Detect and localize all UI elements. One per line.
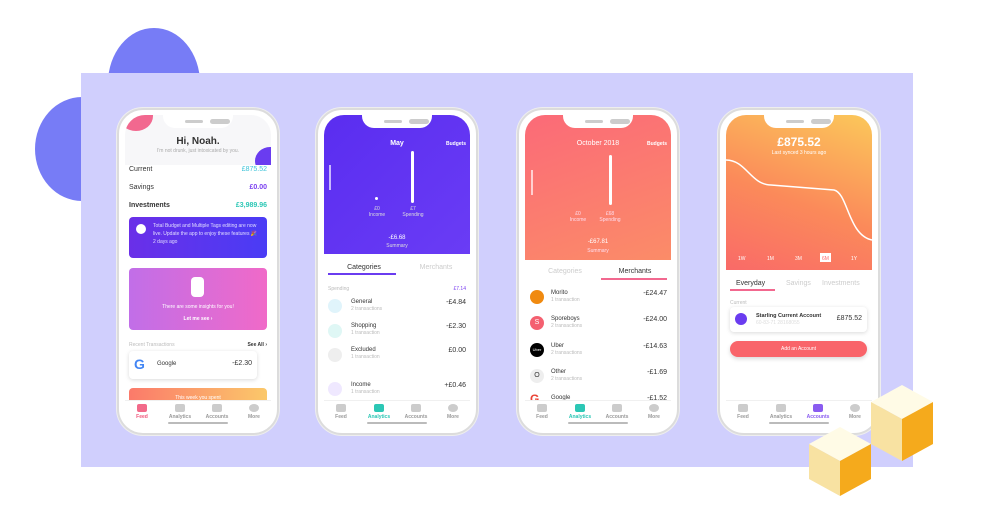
phone 2: categories	[316, 108, 478, 435]
tabs: Categories	[548, 268, 582, 275]
nav: More	[648, 414, 660, 420]
header line chart: 3M	[795, 256, 802, 262]
phone 2: categories: General	[351, 299, 372, 305]
add account button	[730, 341, 867, 357]
header chart: Income	[369, 212, 385, 218]
phone 1: feed	[117, 108, 279, 435]
header chart: Budgets	[446, 141, 466, 147]
header chart: October 2018	[577, 140, 619, 147]
nav	[726, 400, 872, 428]
background blob top	[108, 28, 200, 138]
header line chart: 1Y	[851, 256, 857, 262]
phone 3: merchants: Morito	[551, 290, 568, 296]
phone 3: merchants: G	[530, 392, 539, 406]
account card	[730, 307, 867, 332]
nav: Analytics	[169, 414, 191, 420]
phone 1: feed: £3,989.96	[236, 202, 267, 209]
google transaction: -£2.30	[232, 360, 252, 367]
phone 3: merchants: S	[535, 319, 539, 326]
header line chart: 1W	[738, 256, 746, 262]
insights card	[129, 268, 267, 330]
phone 3: merchants: Sporeboys	[551, 316, 580, 322]
header chart: £7	[410, 206, 416, 212]
balances: Current	[129, 166, 152, 173]
header	[125, 115, 271, 165]
phone 4: accounts: Current	[730, 300, 747, 306]
header: Hi, Noah.	[176, 136, 220, 147]
header chart: Income	[570, 217, 586, 223]
header chart	[525, 115, 671, 260]
header line chart: 1M	[767, 256, 774, 262]
google transaction: G	[134, 356, 145, 372]
insights card: There are some insights for you!	[162, 304, 234, 310]
phone 2: categories: £7.14	[453, 286, 466, 292]
update card	[129, 217, 267, 258]
nav: Analytics	[770, 414, 792, 420]
phone 2: categories: 1 transaction	[351, 354, 380, 360]
spent bar: This week you spent	[175, 395, 221, 401]
insights card: Let me see ›	[184, 316, 212, 322]
phone 2: categories: 1 transaction	[351, 389, 380, 395]
phone 3: merchants	[517, 108, 679, 435]
cubes	[809, 385, 933, 496]
phone 2: categories: £0.00	[448, 347, 466, 354]
header chart: Spending	[402, 212, 424, 218]
nav: Accounts	[206, 414, 228, 420]
rows	[328, 299, 342, 313]
nav: Feed	[737, 414, 749, 420]
nav: Accounts	[807, 414, 829, 420]
account card: £875.52	[837, 315, 862, 322]
nav: Feed	[536, 414, 548, 420]
header chart: Budgets	[647, 141, 667, 147]
phone 3: merchants: Uber	[551, 343, 564, 349]
phone 2: categories: -£2.30	[446, 323, 466, 330]
google transaction: Google	[157, 361, 176, 367]
header line chart: £875.52	[777, 135, 821, 149]
account card: Starling Current Account	[756, 313, 821, 319]
phone 1: feed: £875.52	[242, 166, 267, 173]
tabs: Everyday	[736, 280, 765, 287]
header chart: Summary	[386, 243, 408, 249]
header chart	[324, 115, 470, 254]
header chart: Spending	[599, 217, 621, 223]
header: I'm not drunk, just intoxicated by you.	[157, 148, 239, 154]
nav: Accounts	[405, 414, 427, 420]
add account button: Add an Account	[781, 346, 816, 352]
phone 3: merchants: Merchants	[619, 268, 651, 275]
phone 3: merchants: 1 transaction	[551, 297, 580, 303]
phone 3: merchants: -£1.69	[647, 369, 667, 376]
phone 3: merchants: -£1.52	[647, 395, 667, 402]
header chart: Summary	[587, 248, 609, 254]
header line chart	[726, 115, 872, 270]
phone 1: feed: Investments	[129, 202, 170, 209]
phone 3: merchants: 2 transactions	[551, 376, 582, 382]
nav	[125, 400, 271, 428]
phone 3: merchants: Other	[551, 369, 566, 375]
phone 2: categories: Excluded	[351, 347, 376, 353]
phone 2: categories: 1 transaction	[351, 330, 380, 336]
update card: Total Budget and Multiple Tags editing are now live. Update the app to enjoy these features 🎉	[153, 223, 257, 237]
phone 3: merchants: -£24.47	[643, 290, 667, 297]
header chart: -£6.68	[388, 235, 406, 241]
nav: Analytics	[569, 414, 591, 420]
phone 4: accounts: Investments	[822, 280, 860, 287]
nav	[324, 400, 470, 428]
spent bar	[129, 388, 267, 408]
phone 2: categories: Income	[351, 382, 371, 388]
phone 1: feed: See All ›	[247, 342, 267, 348]
nav: More	[248, 414, 260, 420]
phone 4: accounts: Savings	[786, 280, 811, 287]
header line chart: Last synced 3 hours ago	[772, 150, 826, 156]
nav: More	[849, 414, 861, 420]
merchant rows	[530, 290, 544, 304]
phone 3: merchants: Uber	[533, 347, 541, 352]
background blob left	[35, 97, 129, 201]
nav	[525, 400, 671, 428]
phone 2: categories: Merchants	[420, 264, 452, 271]
nav: More	[447, 414, 459, 420]
nav: Analytics	[368, 414, 390, 420]
account card: 60-83-71 28168055	[756, 320, 800, 326]
phone 3: merchants: 2 transactions	[551, 323, 582, 329]
update card: 2 days ago	[153, 239, 177, 245]
phone 1: feed: Savings	[129, 184, 154, 191]
phone 1: feed: £0.00	[249, 184, 267, 191]
phone 2: categories: Spending	[328, 286, 349, 292]
phone 2: categories: 2 transactions	[351, 306, 382, 312]
header line chart: 6M	[822, 256, 829, 262]
header chart: -£67.81	[588, 239, 608, 245]
google transaction	[129, 351, 257, 379]
phone 3: merchants: Google	[551, 395, 570, 401]
phone 4: accounts	[718, 108, 880, 435]
phone 3: merchants: 2 transactions	[551, 350, 582, 356]
phone 1: feed: Recent Transactions	[129, 342, 175, 348]
nav: Accounts	[606, 414, 628, 420]
tabs: Categories	[347, 264, 381, 271]
nav: Feed	[335, 414, 347, 420]
header chart: £0	[575, 211, 581, 217]
phone 2: categories: Shopping	[351, 323, 376, 329]
phone 3: merchants: -£14.63	[643, 343, 667, 350]
phone 2: categories: +£0.46	[444, 382, 466, 389]
lavender panel	[81, 73, 913, 467]
nav: Feed	[136, 414, 148, 420]
phone 3: merchants: O	[534, 372, 540, 379]
header chart: £0	[374, 206, 380, 212]
header chart: May	[390, 140, 404, 147]
phone 3: merchants: -£24.00	[643, 316, 667, 323]
phone 2: categories: -£4.84	[446, 299, 466, 306]
header chart: £68	[606, 211, 614, 217]
